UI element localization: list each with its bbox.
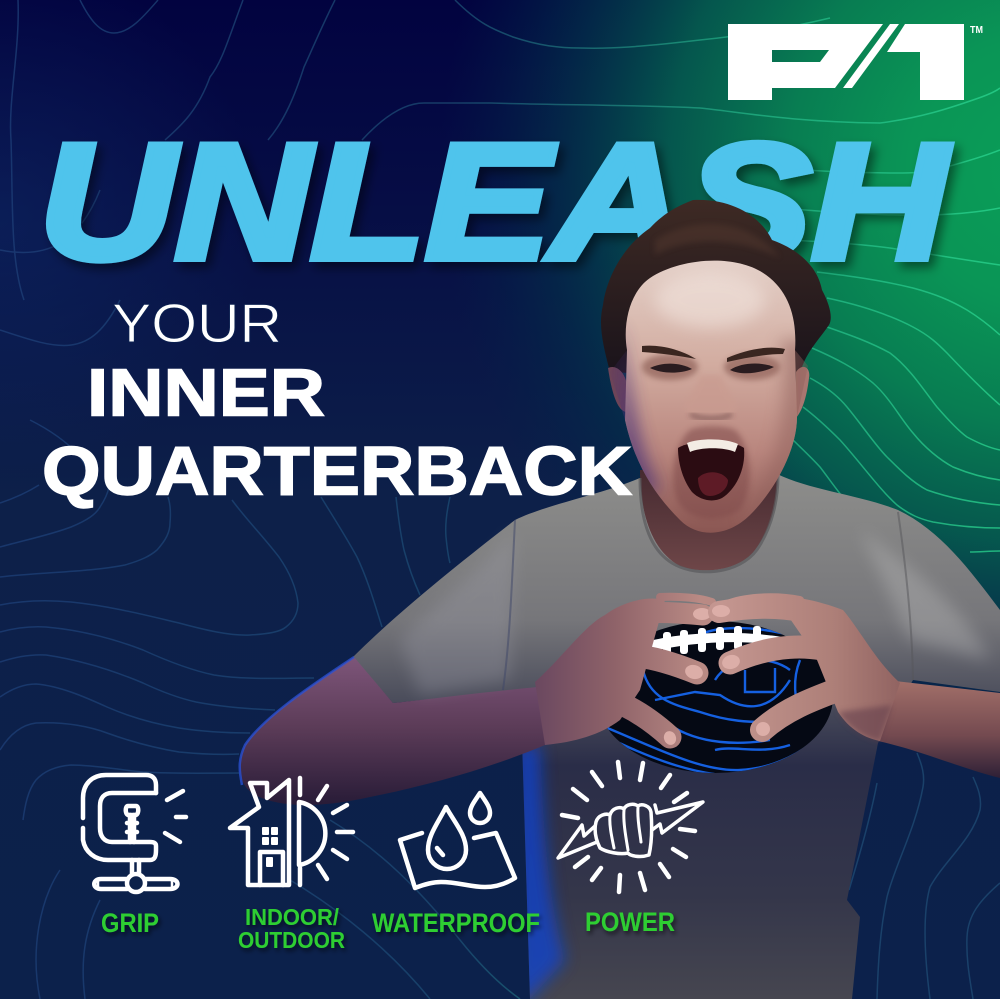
left ear xyxy=(608,367,627,412)
neck xyxy=(640,470,778,570)
label: waterproof: WATERPROOF xyxy=(372,908,540,938)
mouth xyxy=(678,441,744,500)
football blue seam lines xyxy=(607,626,804,773)
title: UNLEASH: UNLEASH xyxy=(39,110,950,294)
teeth xyxy=(687,439,738,452)
icon: power fist with lightning xyxy=(558,762,703,892)
logo: P1 xyxy=(728,24,983,100)
right eyebrow xyxy=(727,348,785,362)
QUARTERBACK: QUARTERBACK xyxy=(42,432,632,510)
left arm xyxy=(240,657,560,805)
left hand fingernails xyxy=(662,608,711,747)
icon: indoor/outdoor house and sun xyxy=(230,778,353,885)
INNER: INNER xyxy=(87,356,325,430)
icon: waterproof drops and cloth xyxy=(400,793,515,888)
hair sheen xyxy=(655,224,780,258)
right hand fingernails xyxy=(712,605,770,736)
sleeve shading xyxy=(400,530,515,695)
right hand shadow xyxy=(838,705,892,741)
left eyebrow xyxy=(642,346,696,359)
left eye xyxy=(650,364,692,373)
right eye xyxy=(730,364,774,373)
tongue xyxy=(698,472,728,496)
label: power: POWER xyxy=(585,907,675,937)
YOUR: YOUR xyxy=(112,292,282,354)
shirt blue rim light xyxy=(515,745,565,999)
logo: P1: TM xyxy=(970,25,983,36)
bottom right contour lines xyxy=(849,753,1000,999)
football xyxy=(597,621,833,776)
label: grip: GRIP xyxy=(101,908,159,938)
face shading xyxy=(620,272,810,520)
label: indoor: INDOOR/ xyxy=(245,904,340,930)
icon: grip clamp xyxy=(83,775,186,892)
shirt xyxy=(353,474,1000,999)
right forearm xyxy=(878,681,1000,778)
right ear xyxy=(796,367,809,418)
face xyxy=(625,261,797,533)
feature labels xyxy=(101,904,675,953)
football laces xyxy=(646,626,782,656)
left hand xyxy=(535,597,712,747)
hair xyxy=(601,200,831,382)
headline: YOUR INNER QUARTERBACK xyxy=(42,292,632,510)
label: outdoor: OUTDOOR xyxy=(238,927,345,953)
right hand xyxy=(712,597,900,741)
nose xyxy=(684,375,737,418)
person xyxy=(240,200,1000,999)
collar xyxy=(640,476,778,572)
arm rim highlight xyxy=(240,657,354,785)
